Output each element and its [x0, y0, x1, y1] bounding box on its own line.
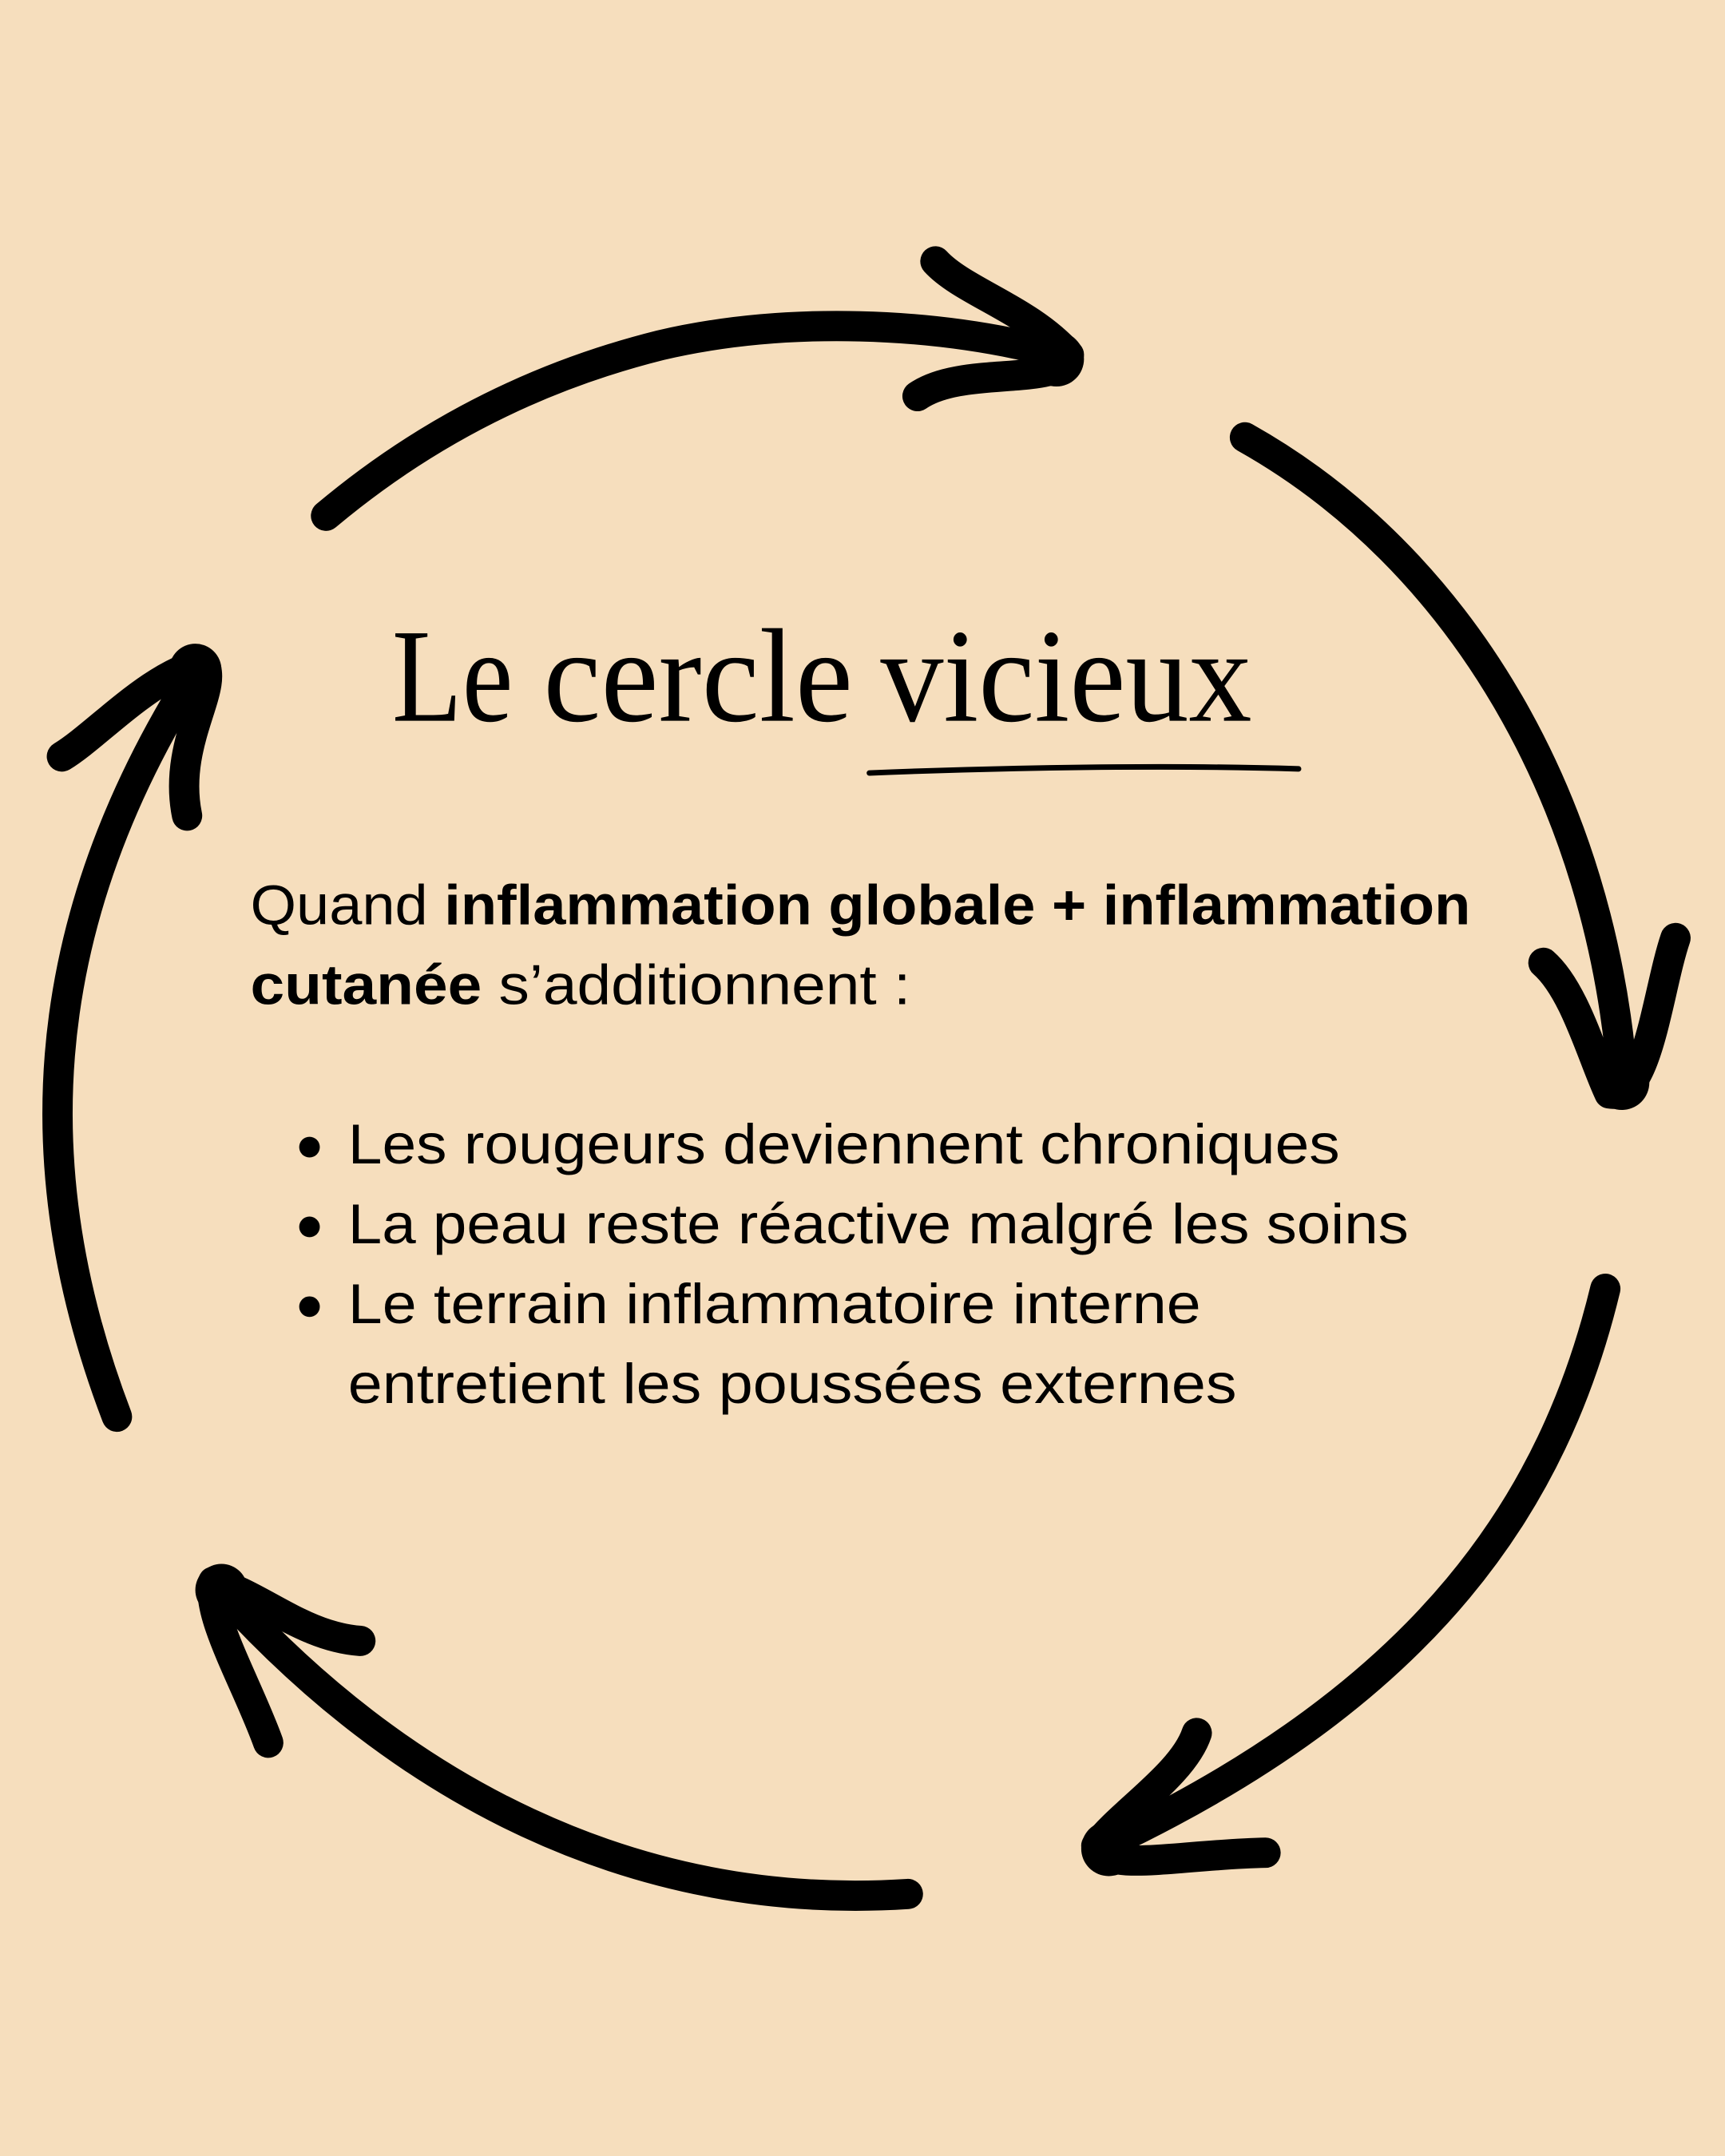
- bullet 1: Les rougeurs deviennent chroniques: [348, 1112, 1340, 1175]
- title: vicieux: [880, 603, 1251, 751]
- arrow: bottom left: [196, 1563, 908, 1896]
- bullet 3: [299, 1272, 1237, 1415]
- intro text: Quand inflammation globale + inflammation: [250, 874, 1470, 937]
- intro text: cutanée s’additionnent :: [250, 953, 910, 1016]
- title underline: [870, 767, 1299, 773]
- title: Le: [392, 603, 513, 751]
- arrow: left: [58, 644, 221, 1417]
- bullet 3: entretient les poussées externes: [348, 1352, 1237, 1415]
- bullet 2: La peau reste réactive malgré les soins: [348, 1192, 1409, 1255]
- arrow: top: [326, 261, 1084, 516]
- bullet 3: Le terrain inflammatoire interne: [348, 1272, 1201, 1335]
- arrow: bottom right: [1081, 1289, 1605, 1876]
- bullet list: [299, 1112, 1409, 1415]
- intro text: [250, 874, 1470, 1016]
- title: cercle: [543, 603, 853, 751]
- title: [392, 603, 1251, 751]
- arrow: right: [1245, 438, 1675, 1110]
